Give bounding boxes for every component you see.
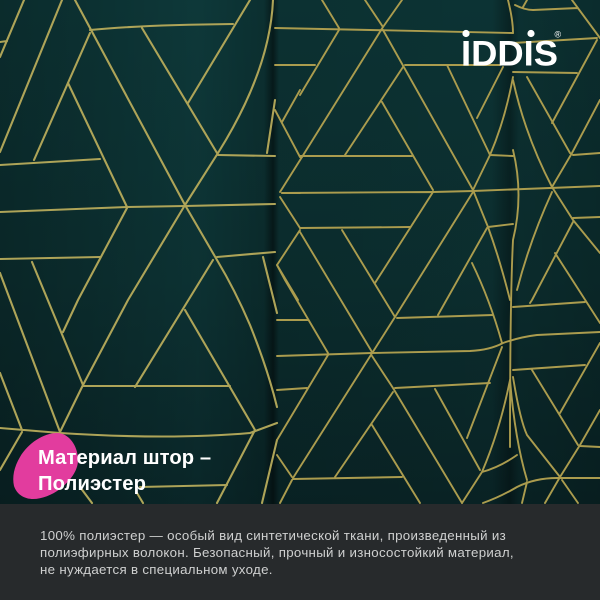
- caption panel: [0, 504, 600, 600]
- logo: IDDIS: ®: [554, 30, 562, 40]
- logo: IDDIS: IDDIS: [461, 34, 558, 74]
- heading: Полиэстер: [38, 473, 146, 495]
- geometric gold pattern: middle curtain panel: [275, 0, 600, 503]
- heading: [38, 447, 211, 495]
- description text: полиэфирных волокон. Безопасный, прочный и износостойкий материал,: [40, 545, 514, 560]
- geometric gold pattern: left curtain panel: [0, 0, 277, 503]
- geometric gold pattern: right curtain panel: [483, 0, 600, 503]
- heading: Материал штор –: [38, 447, 211, 469]
- description text: не нуждается в специальном уходе.: [40, 562, 273, 577]
- description text: [40, 528, 514, 577]
- pink accent blob: [13, 433, 78, 499]
- description text: 100% полиэстер — особый вид синтетической ткани, произведенный из: [40, 528, 506, 543]
